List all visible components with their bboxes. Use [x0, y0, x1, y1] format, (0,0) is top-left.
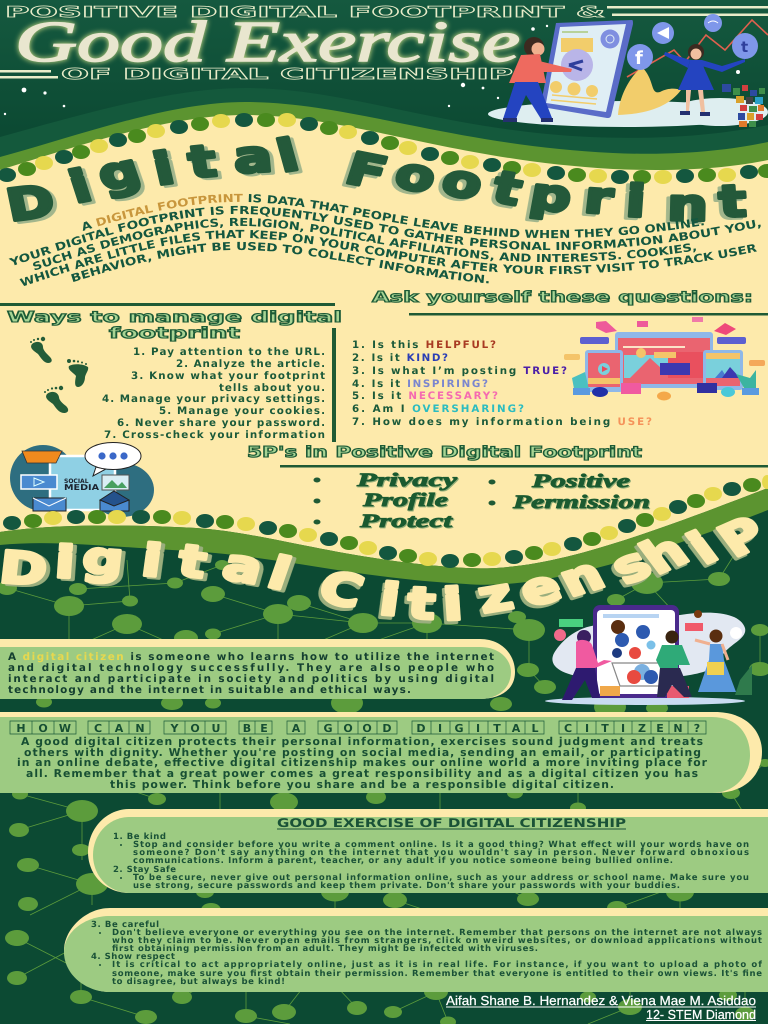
- heading: digital footprint: Footprint: [339, 143, 748, 232]
- panel: good exercise 3 and 4: someone, make sure you first obtain their permission. Remember that everyone is entitled to their own views. It's fine: [112, 969, 762, 979]
- list: 5P's words: Privacy: [355, 470, 458, 491]
- list: 5P's words: Protect: [358, 511, 453, 532]
- panel: good exercise 3 and 4: 4. Show respect: [91, 952, 175, 962]
- heading: digital footprint: Digital: [2, 130, 304, 232]
- list: questions: [352, 339, 652, 428]
- icon: footprints: [30, 337, 88, 413]
- panel: good exercise 1 and 2: To be secure, never give out personal information online, such as your address or school name. Make sure you: [133, 873, 749, 883]
- panel: how can you be a good digital citizen: this power. Think before you share and be a responsible digital citizen.: [110, 778, 614, 791]
- credits: 12- STEM Diamond: [646, 1007, 756, 1022]
- list: questions: 1. Is this HELPFUL?: [352, 339, 496, 351]
- beads: top wave: [0, 113, 768, 184]
- illustration: people with phone: f: [635, 48, 643, 69]
- panel: how can you be a good digital citizen: all. Remember that a great power comes a great responsibility and as a digital citizen you has: [26, 767, 698, 780]
- list: ways to manage: 5. Manage your cookies.: [159, 405, 325, 417]
- beads: lower wave: [3, 475, 768, 568]
- list: ways to manage: 6. Never share your password.: [117, 417, 325, 429]
- credits: Aifah Shane B. Hernandez & Viena Mae M. Asiddao: [446, 993, 756, 1008]
- list: 5P's words: Profile: [361, 490, 449, 511]
- divider between lists: [332, 328, 336, 442]
- illustration: social media: MEDIA: [64, 483, 100, 492]
- list: questions: 2. Is it KIND?: [352, 352, 448, 364]
- panel: how can you be a good digital citizen: others with dignity. Whether you're posting on social media, sending an email, or participating: [24, 746, 701, 759]
- panel: how can you be a good digital citizen: [0, 712, 762, 793]
- bullets: 5P's: [314, 478, 496, 524]
- heading: digital citizenship: Digital: [0, 532, 297, 601]
- panel: how can you be a good digital citizen: A good digital citizen protects their personal information, exercises sound judgment and treats: [21, 735, 703, 748]
- panel: good exercise 1 and 2: someone? Don't say anything on the internet that you wouldn't say in person. Never forward obnoxious: [133, 848, 749, 858]
- panel: how can you be a good digital citizen: in an online debate, effective digital citizenship makes our online world a more inviting place for: [17, 756, 708, 769]
- heading: ways to manage digital footprint: footprint: [109, 324, 240, 342]
- illustration: people with phone: t: [741, 38, 748, 56]
- illustration: people with phone: [488, 14, 768, 127]
- panel: what is a digital citizen: [0, 639, 515, 699]
- panel: good exercise 1 and 2: Stop and consider before you write a comment online. Is it a good thing? What effect will your words have on: [133, 840, 749, 850]
- panel: good exercise 1 and 2: GOOD EXERCISE OF DIGITAL CITIZENSHIP: [277, 816, 626, 830]
- curved paragraph: digital footprint definition: WHICH ARE LITTLE FILES THAT KEEP ON YOUR COMPUTER AFTER YOUR FIRST VISIT TO TRACK USER: [20, 230, 757, 286]
- heading: 5P's: 5P's in Positive Digital Footprint: [247, 443, 642, 461]
- panel: good exercise 1 and 2: [88, 809, 768, 893]
- list: 5P's words: [355, 470, 650, 532]
- curved paragraph: digital footprint definition: BEHAVIOR, MIGHT BE USED TO COLLECT INFORMATION.: [71, 242, 489, 284]
- list: questions: 6. Am I OVERSHARING?: [352, 403, 524, 415]
- curved paragraph: digital footprint definition: SUCH AS DEMOGRAPHICS, RELIGION, POLITICAL AFFILIATIONS, AND INTERESTS. COOKIES,: [33, 218, 696, 270]
- credits: [446, 993, 756, 1022]
- panel: what is a digital citizen: and digital technology successfully. They are also people who: [8, 662, 494, 674]
- list: ways to manage: 4. Manage your privacy settings.: [102, 393, 325, 405]
- list: ways to manage: 3. Know what your footprint: [131, 370, 325, 382]
- heading: ways to manage digital footprint: Ways to manage digital: [7, 308, 342, 326]
- panel: good exercise 1 and 2: 2. Stay Safe: [113, 865, 176, 875]
- heading: digital footprint: [2, 130, 748, 232]
- header line: positive digital footprint: POSITIVE DIGITAL FOOTPRINT &: [5, 3, 605, 21]
- panel: what is a digital citizen: technology and the internet in suitable and ethical ways.: [8, 684, 411, 696]
- illustration: social media: SOCIAL: [64, 478, 89, 485]
- list: questions: 5. Is it NECESSARY?: [352, 390, 498, 402]
- heading: ask yourself these questions: Ask yourself these questions:: [372, 288, 753, 306]
- illustration: online shopping citizens: [545, 605, 752, 705]
- list: questions: 3. Is what I’m posting TRUE?: [352, 365, 567, 377]
- top wave bands: [0, 88, 768, 200]
- panel: good exercise 1 and 2: communications. Inform a parent, teacher, or any adult if you notice someone being bullied online.: [133, 856, 673, 866]
- illustration: social devices: [564, 317, 765, 400]
- panel: good exercise 3 and 4: 3. Be careful: [91, 920, 159, 930]
- panel: what is a digital citizen: A digital citizen is someone who learns how to utilize the internet: [8, 651, 494, 663]
- main title: good exercise: Good Exercise: [15, 9, 520, 74]
- cream footprint background: [0, 115, 768, 568]
- illustration: social media: [10, 442, 154, 517]
- sparkles: [4, 25, 740, 115]
- list: ways to manage: 7. Cross-check your information: [104, 429, 325, 441]
- list: 5P's words: Positive: [530, 471, 631, 492]
- header line: of digital citizenship: OF DIGITAL CITIZENSHIP: [61, 65, 513, 83]
- list: ways to manage: 1. Pay attention to the URL.: [133, 346, 325, 358]
- panel: what is a digital citizen: interact and participate in society and politics by using digital: [8, 673, 494, 685]
- panel: good exercise 1 and 2: use strong, secure passwords and keep them private. Don't share your passwords with your buddies.: [133, 881, 680, 891]
- panel: how can you be a good digital citizen: HOW CAN YOU BE A GOOD DIGITAL CITIZEN?: [16, 722, 700, 735]
- heading: digital citizenship: [0, 507, 768, 631]
- network background: [0, 530, 768, 1024]
- panel: good exercise 3 and 4: to disagree, but always be kind!: [112, 977, 285, 987]
- list: ways to manage: [102, 346, 325, 441]
- list: questions: 4. Is it INSPIRING?: [352, 378, 488, 390]
- lower wave band: [0, 488, 768, 585]
- heading: ways to manage digital footprint: [0, 303, 342, 342]
- panel: good exercise 1 and 2: 1. Be kind: [113, 832, 166, 842]
- curved paragraph: digital footprint definition: A DIGITAL FOOTPRINT IS DATA THAT PEOPLE LEAVE BEHIND WHEN THEY GO ONLINE.: [82, 194, 704, 238]
- list: ways to manage: tells about you.: [219, 382, 325, 394]
- panel: good exercise 3 and 4: Don't believe everyone or everything you see on the internet. Remember that persons on the internet are not always: [112, 928, 762, 938]
- panel: good exercise 3 and 4: first obtaining permission from an adult. They might be infected with viruses.: [112, 944, 538, 954]
- list: 5P's words: Permission: [511, 492, 650, 513]
- panel: good exercise 3 and 4: [64, 908, 768, 992]
- curved paragraph: digital footprint definition: YOUR DIGITAL FOOTPRINT IS FREQUENTLY USED TO GATHER PERSONAL INFORMATION ABOUT YOU,: [8, 206, 761, 266]
- list: ways to manage: 2. Analyze the article.: [176, 358, 325, 370]
- heading: digital citizenship: CitizenshiP: [312, 507, 768, 631]
- panel: good exercise 3 and 4: who they claim to be. Never open emails from strangers, click on weird websites, or download applications without: [112, 936, 762, 946]
- panel: good exercise 3 and 4: It is critical to act appropriately online, just as it is in real life. For instance, if you want to upload a photo of: [112, 960, 762, 970]
- list: questions: 7. How does my information being USE?: [352, 416, 652, 428]
